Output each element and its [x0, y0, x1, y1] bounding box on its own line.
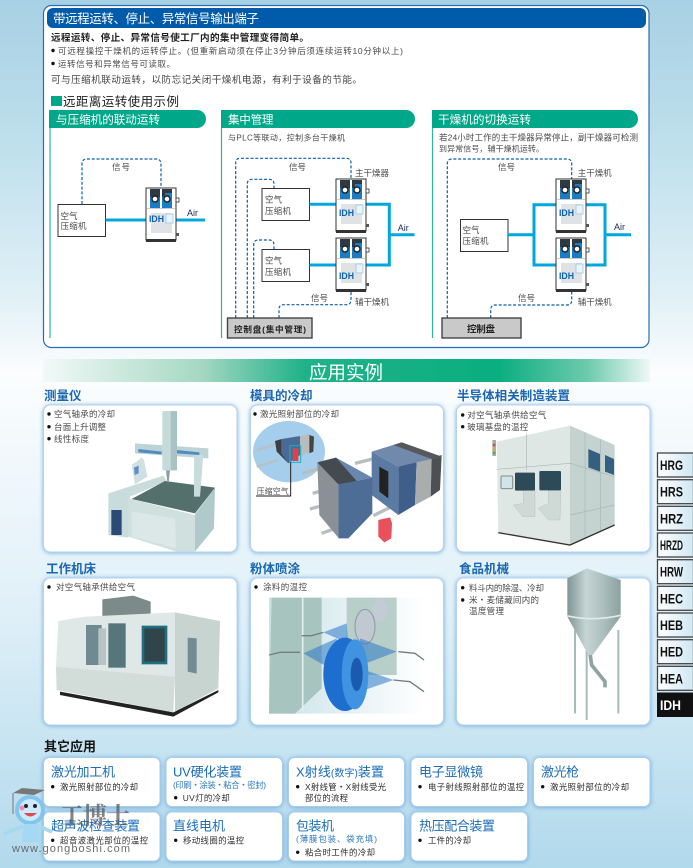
- illustration: powder coating scene: [269, 598, 424, 714]
- control panel box: 控制盘: [467, 324, 495, 336]
- sub-panel: centralized management: 空气: [265, 194, 282, 204]
- card: ultrasonic inspection: [44, 812, 160, 861]
- card: X-ray: X射线管・X射线受光: [305, 782, 387, 792]
- card: coordinate measuring machine: 空气轴承的冷却: [54, 409, 115, 419]
- card: UV curing: (印刷・涂装・粘合・密封): [173, 780, 266, 790]
- model tabs: [657, 453, 693, 717]
- tab HEC: [658, 586, 693, 610]
- sub-panel: centralized management: 集中管理: [228, 112, 274, 126]
- card: electron microscope: 电子显微镜: [419, 764, 483, 780]
- card: laser gun: [534, 758, 650, 806]
- illustration: machine tool: [56, 596, 220, 717]
- card: mold cooling: [250, 388, 444, 552]
- sub-panel: dryer switchover: IDH: [559, 271, 574, 282]
- tab HRG: [658, 453, 693, 477]
- card: semiconductor equipment: [456, 388, 650, 552]
- tab HRZ: [658, 506, 693, 530]
- sub-panel: dryer switchover: 到异常信号，辅干燥机运转。: [439, 144, 544, 154]
- tab HEA: HEA: [660, 670, 683, 686]
- illustration: injection mold: [253, 421, 442, 542]
- illustration: hopper silo: [567, 568, 621, 720]
- card: laser processing: 激光照射部位的冷却: [60, 782, 138, 792]
- tab HED: HED: [660, 644, 683, 660]
- panel: remote signal terminals: [44, 6, 649, 348]
- sub-panel: dryer switchover: 若24小时工作的主干燥器异常停止，副干燥器可检测: [439, 132, 638, 142]
- sub-panel: centralized management: IDH: [339, 271, 354, 282]
- card: food machinery: 温度管理: [469, 606, 504, 616]
- tab HRG: HRG: [660, 457, 683, 473]
- card: semiconductor equipment: 对空气轴承供给空气: [467, 410, 547, 420]
- sub-panel: centralized management: 主干燥器: [355, 168, 389, 178]
- intro text block: 可远程操控干燥机的运转停止。(但重新启动须在停止3分钟后须连续运转10分钟以上): [58, 46, 403, 56]
- sub-panel: linked with compressor: 空气: [60, 211, 78, 221]
- card: food machinery: 料斗内的除湿、冷却: [469, 583, 544, 593]
- sub-panel: linked with compressor: Air: [187, 208, 198, 218]
- card: UV curing: [166, 758, 282, 806]
- card: linear motor: 移动线圈的温控: [183, 836, 245, 846]
- card: semiconductor equipment: 半导体相关制造装置: [457, 388, 570, 403]
- tab HEC: HEC: [660, 590, 683, 606]
- card: shrink fitting: [411, 812, 528, 861]
- sub-panel: centralized management: 空气: [265, 256, 282, 266]
- sub-panel: centralized management: IDH: [339, 208, 354, 219]
- card: laser processing: 激光加工机: [51, 764, 115, 780]
- illustration: clean-room equipment: [492, 426, 615, 545]
- heading: other applications: 其它应用: [44, 739, 96, 754]
- card: semiconductor equipment: 玻璃基盘的温控: [467, 422, 529, 432]
- card: shrink fitting: 工件的冷却: [428, 836, 471, 846]
- card: shrink fitting: 热压配合装置: [419, 818, 495, 833]
- tab HED: [658, 640, 693, 664]
- card: laser gun: 激光照射部位的冷却: [550, 782, 629, 792]
- tab HEA: [658, 666, 693, 690]
- card: ultrasonic inspection: 超声波检查装置: [51, 818, 140, 833]
- sub-panel: dryer switchover: 主干燥机: [578, 168, 612, 178]
- watermark: mascot and site name: [4, 788, 130, 855]
- card: X-ray: X射线(数字)装置: [296, 764, 384, 780]
- banner: application examples: 应用实例: [309, 362, 383, 383]
- card: powder coating: 涂料的温控: [263, 582, 307, 592]
- section heading: remote operation examples: 远距离运转使用示例: [63, 94, 179, 109]
- card: laser gun: 激光枪: [541, 764, 579, 780]
- sub-panel: centralized management: 信号: [311, 293, 328, 303]
- card: linear motor: 直线电机: [173, 818, 225, 833]
- sub-panel: dryer switchover: 空气: [462, 225, 480, 235]
- tab HRZ: HRZ: [660, 510, 683, 526]
- tab HRZD: [658, 533, 693, 557]
- illustration: measuring machine: [108, 411, 215, 552]
- sub-panel: dryer switchover: [432, 110, 638, 338]
- control panel box: 控制盘(集中管理): [234, 324, 306, 334]
- tab IDH active: IDH: [660, 697, 681, 713]
- sub-panel: centralized management: [221, 110, 415, 338]
- watermark: mascot and site name: www.gongboshi.com: [11, 843, 130, 855]
- tab HRW: HRW: [660, 564, 684, 580]
- card: electron microscope: [411, 758, 528, 806]
- tab HRS: [658, 480, 693, 504]
- card: powder coating: [250, 561, 444, 725]
- banner: application examples: [43, 359, 650, 383]
- card: packaging: 粘合时工件的冷却: [305, 848, 375, 858]
- card: food machinery: [456, 561, 650, 725]
- sub-panel: dryer switchover: 干燥机的切换运转: [438, 112, 531, 126]
- sub-panel: centralized management: 与PLC等联动，控制多台干燥机: [228, 132, 345, 142]
- intro text block: 远程运转、停止、异常信号使工厂内的集中管理变得简单。: [51, 32, 309, 44]
- card: coordinate measuring machine: 台面上升调整: [54, 422, 106, 432]
- intro text block: [51, 32, 403, 86]
- sub-panel: centralized management: 压缩机: [265, 267, 291, 277]
- sub-panel: dryer switchover: IDH: [559, 208, 574, 219]
- sub-panel: dryer switchover: 辅干燥机: [578, 297, 612, 307]
- card: machine tool: [44, 561, 237, 725]
- intro text block: 运转信号和异常信号可读取。: [58, 59, 175, 69]
- other applications cards: [44, 758, 650, 861]
- card: coordinate measuring machine: 测量仪: [44, 388, 82, 403]
- tab HEB: HEB: [660, 617, 683, 633]
- control panel box: [228, 318, 312, 338]
- card: coordinate measuring machine: 线性标度: [54, 434, 89, 444]
- sub-panel: linked with compressor: [49, 110, 206, 338]
- tab HEB: [658, 613, 693, 637]
- card: mold cooling: 压缩空气: [257, 486, 289, 496]
- sub-panel: dryer switchover: 信号: [518, 293, 535, 303]
- sub-panel: dryer switchover: 压缩机: [462, 236, 489, 246]
- sub-panel: linked with compressor: IDH: [149, 214, 164, 225]
- panel heading bar: [47, 8, 646, 28]
- card: laser processing: [44, 758, 160, 806]
- panel heading bar: 带远程运转、停止、异常信号输出端子: [53, 11, 259, 26]
- card: powder coating: 粉体喷涂: [250, 561, 301, 576]
- card: packaging: (薄膜包装、袋充填): [296, 834, 377, 844]
- card: machine tool: 工作机床: [46, 561, 97, 576]
- card: X-ray: 部位的流程: [305, 793, 349, 803]
- card: UV curing: UV硬化装置: [173, 764, 242, 780]
- tab IDH active: [657, 692, 693, 717]
- card: packaging: [288, 812, 404, 861]
- mascot: [4, 788, 52, 842]
- card: mold cooling: 激光照射部位的冷却: [260, 409, 339, 419]
- sub-panel: centralized management: 信号: [289, 162, 306, 172]
- sub-panel: dryer switchover: 信号: [498, 162, 515, 172]
- sub-panel: centralized management: 压缩机: [265, 206, 291, 216]
- card: linear motor: [166, 812, 282, 861]
- sub-panel: centralized management: Air: [398, 223, 409, 233]
- tab HRS: HRS: [660, 484, 683, 500]
- intro text block: 可与压缩机联动运转，以防忘记关闭干燥机电源，有利于设备的节能。: [51, 74, 362, 86]
- card: food machinery: 食品机械: [459, 561, 510, 576]
- card: electron microscope: 电子射线照射部位的温控: [428, 782, 525, 792]
- card: machine tool: 对空气轴承供给空气: [56, 582, 135, 592]
- sub-panel: centralized management: 辅干燥机: [355, 297, 389, 307]
- sub-panel: linked with compressor: 信号: [112, 162, 130, 172]
- control panel box: [442, 318, 521, 338]
- sub-panel: linked with compressor: 与压缩机的联动运转: [56, 112, 160, 126]
- sub-panel: dryer switchover: Air: [614, 222, 625, 232]
- sub-panel: linked with compressor: 压缩机: [60, 221, 87, 231]
- card: mold cooling: 模具的冷却: [250, 388, 313, 403]
- tab HRW: [658, 560, 693, 584]
- card: coordinate measuring machine: [44, 388, 237, 552]
- card: ultrasonic inspection: 超音波激光部位的温控: [60, 836, 149, 846]
- card: food machinery: 米・麦储藏间内的: [469, 595, 539, 605]
- card: UV curing: UV灯的冷却: [183, 793, 230, 803]
- card: packaging: 包装机: [296, 818, 334, 833]
- watermark: mascot and site name: 工博士: [60, 803, 130, 830]
- card: X-ray: [288, 758, 404, 806]
